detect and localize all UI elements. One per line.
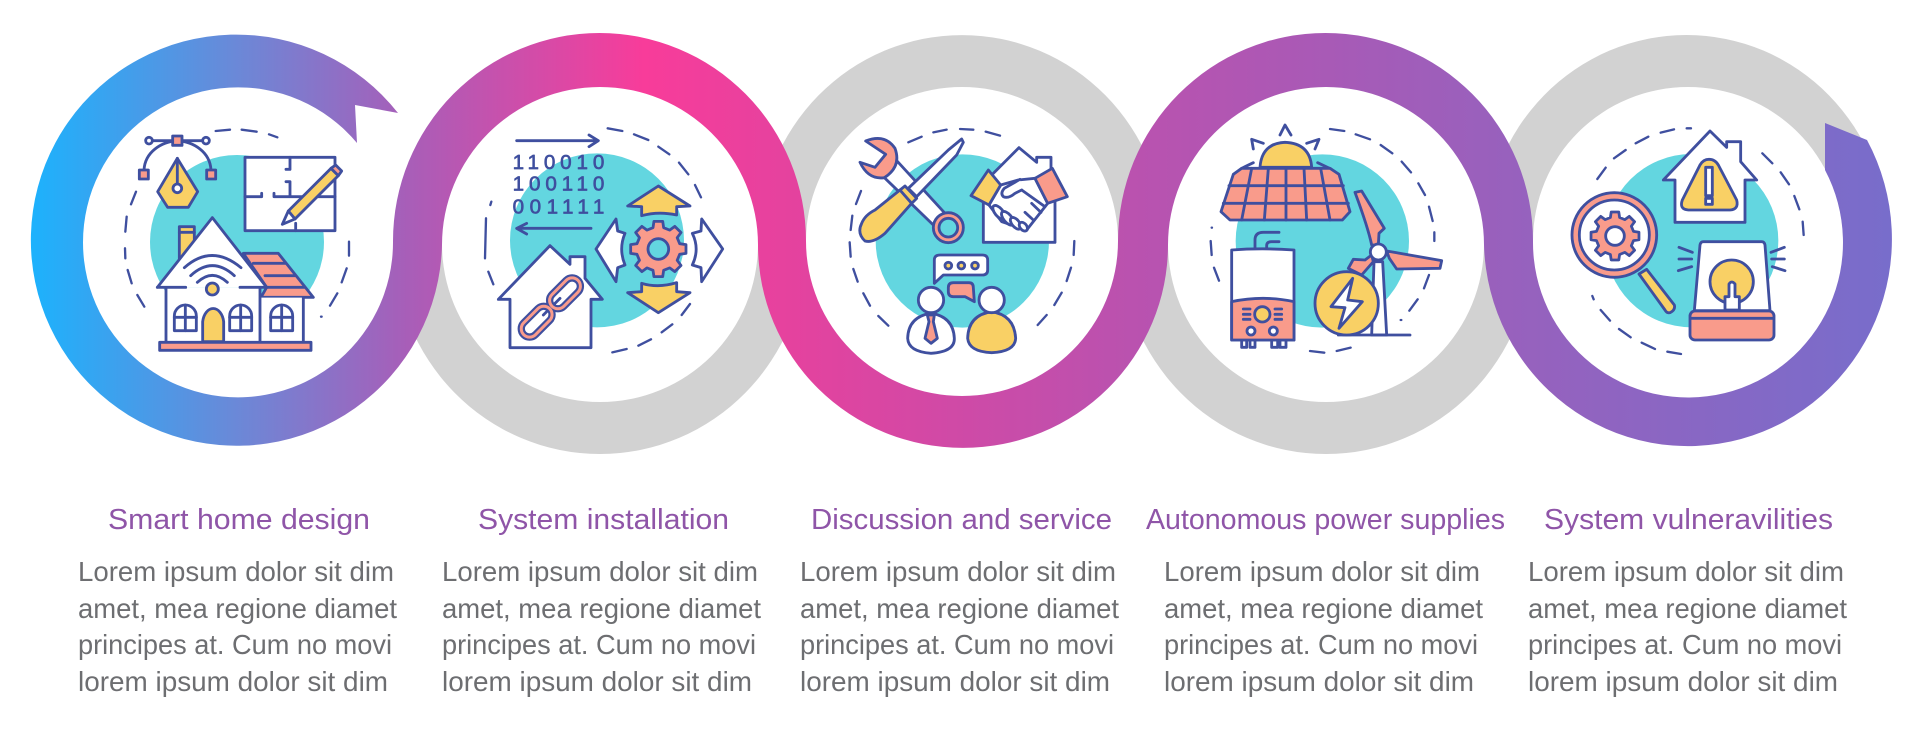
icon: gear with four arrows	[596, 186, 723, 313]
text column: discussion and service: Discussion and service	[811, 504, 1112, 536]
text column: system vulneravilities: lorem ipsum dolor sit dim	[1528, 666, 1838, 697]
icon: wind turbine with energy symbol	[1315, 191, 1442, 335]
text column: system vulneravilities	[1528, 504, 1847, 697]
panel: smart home design icon	[125, 130, 349, 350]
text column: smart home design: lorem ipsum dolor sit dim	[78, 666, 388, 697]
text column: autonomous power supplies: principes at. Cum no movi	[1164, 629, 1478, 660]
icon: pen tool	[139, 136, 216, 207]
text column: smart home design: Smart home design	[108, 504, 370, 536]
text column: autonomous power supplies: lorem ipsum dolor sit dim	[1164, 666, 1474, 697]
text column: discussion and service: principes at. Cum no movi	[800, 629, 1114, 660]
icon: wrench and screwdriver	[860, 138, 963, 243]
panel: autonomous power supplies icon	[1211, 125, 1442, 353]
text column: system installation: Lorem ipsum dolor sit dim	[442, 556, 758, 587]
icon: boiler	[1232, 232, 1294, 347]
text column: autonomous power supplies: amet, mea regione diamet	[1164, 593, 1483, 624]
icon: sun and solar panel	[1221, 125, 1350, 220]
panel: system vulnerabilities icon	[1572, 128, 1804, 354]
icon: house with chain link	[498, 246, 602, 348]
text column: system vulneravilities: System vulneravilities	[1544, 504, 1833, 536]
icon: binary data with arrows: 100110	[513, 173, 604, 196]
icon: alarm beacon	[1678, 242, 1785, 340]
panel: discussion and service icon	[850, 129, 1074, 353]
icon: two people talking	[908, 255, 1016, 353]
text column: autonomous power supplies: Autonomous power supplies	[1146, 504, 1505, 536]
text column: system vulneravilities: Lorem ipsum dolor sit dim	[1528, 556, 1844, 587]
text column: system installation: lorem ipsum dolor sit dim	[442, 666, 752, 697]
text column: smart home design: principes at. Cum no movi	[78, 629, 392, 660]
icon: magnifier with gear	[1572, 193, 1675, 313]
text column: system installation	[442, 504, 761, 697]
icon: binary data with arrows: 110010	[513, 151, 604, 174]
icon: house with warning sign	[1663, 131, 1757, 222]
text column: autonomous power supplies: Lorem ipsum dolor sit dim	[1164, 556, 1480, 587]
text column: smart home design	[78, 504, 397, 697]
icon: smart house with wifi	[157, 218, 313, 350]
panel: system installation icon	[485, 128, 723, 352]
grey background rings	[394, 35, 1888, 454]
icon: floor plan with pencil	[245, 157, 342, 231]
text column: smart home design: Lorem ipsum dolor sit dim	[78, 556, 394, 587]
text column: discussion and service: lorem ipsum dolor sit dim	[800, 666, 1110, 697]
text column: system installation: amet, mea regione diamet	[442, 593, 761, 624]
text column: system vulneravilities: amet, mea regione diamet	[1528, 593, 1847, 624]
text column: discussion and service	[800, 504, 1119, 697]
icon: binary data with arrows	[513, 135, 604, 234]
text column: smart home design: amet, mea regione diamet	[78, 593, 397, 624]
gradient ribbon with arrow head and tail	[31, 33, 1892, 448]
text column: system vulneravilities: principes at. Cum no movi	[1528, 629, 1842, 660]
text column: discussion and service: Lorem ipsum dolor sit dim	[800, 556, 1116, 587]
text column: autonomous power supplies	[1146, 504, 1505, 697]
text column: system installation: principes at. Cum no movi	[442, 629, 756, 660]
text column: system installation: System installation	[478, 504, 729, 536]
icon: binary data with arrows: 001111	[513, 195, 604, 218]
icon: house with handshake	[971, 148, 1067, 242]
text column: discussion and service: amet, mea regione diamet	[800, 593, 1119, 624]
